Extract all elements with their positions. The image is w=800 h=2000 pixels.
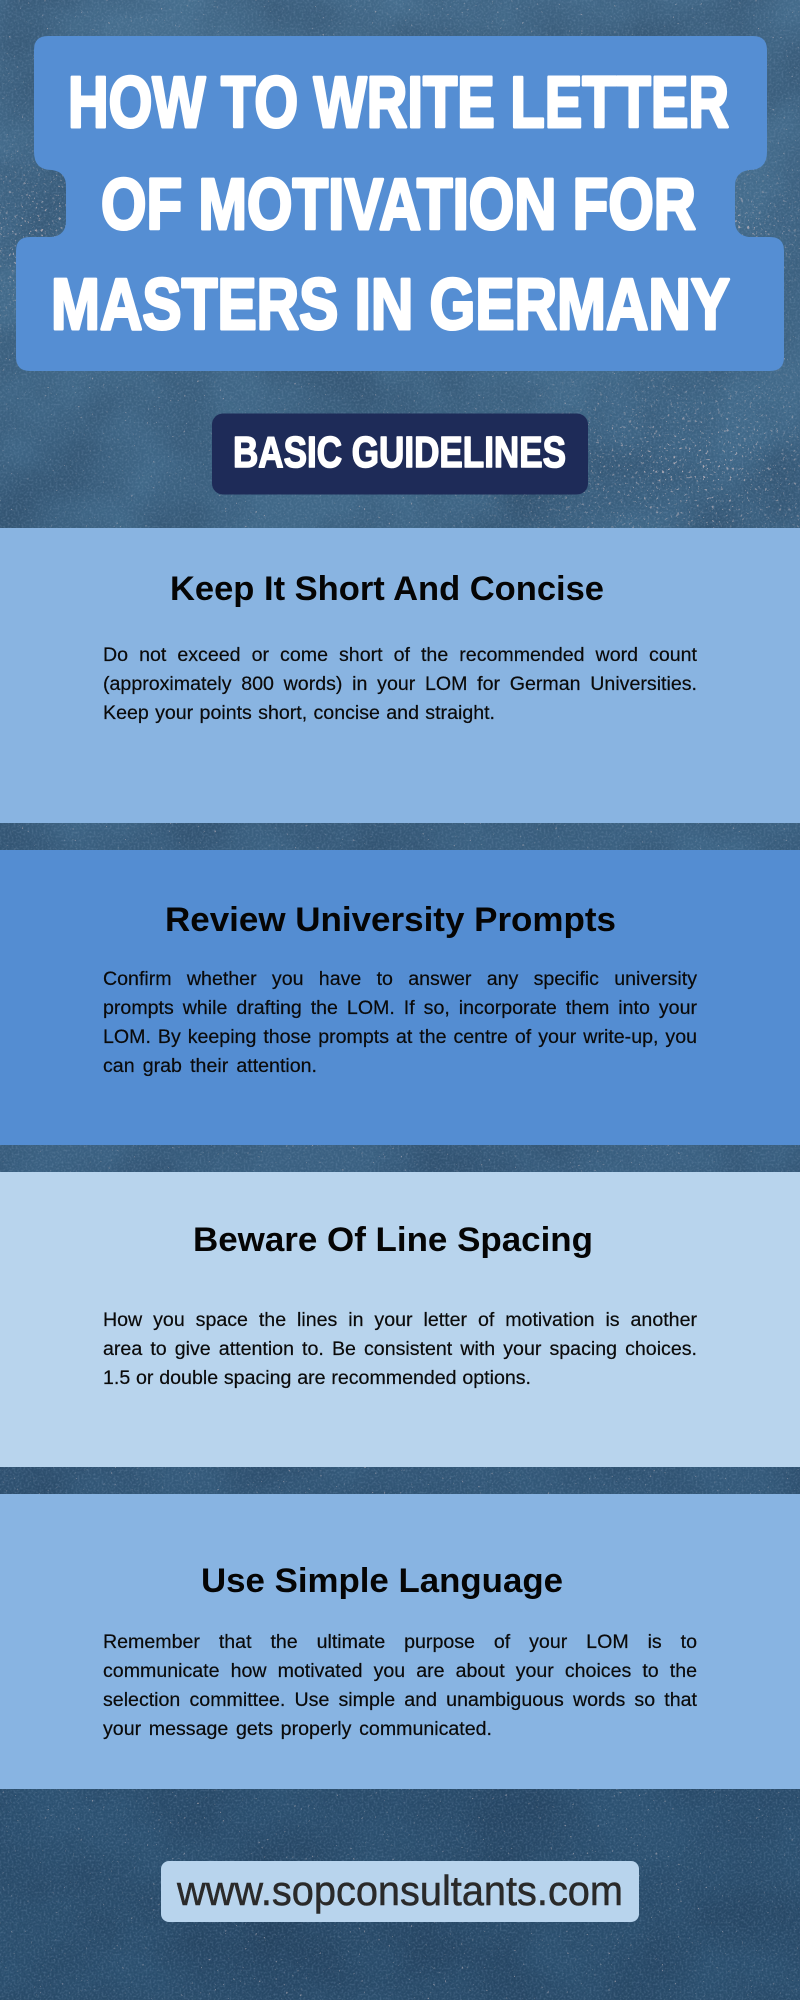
- body text: language: [103, 1631, 697, 1740]
- body text: language: Remember that the ultimate purpose of your LOM is to: [103, 1631, 697, 1653]
- body text: prompts: prompts while drafting the LOM. If so, incorporate them into your: [103, 997, 697, 1019]
- heading: line spacing: Beware Of Line Spacing: [193, 1221, 593, 1259]
- title banner shape: [16, 36, 784, 371]
- panel: use simple language: [0, 1494, 800, 1789]
- body text: spacing: [103, 1309, 697, 1389]
- subtitle badge: [212, 414, 588, 494]
- body text: language: your message gets properly communicated.: [103, 1718, 492, 1740]
- body text: prompts: Confirm whether you have to answer any specific university: [103, 968, 697, 990]
- body text: spacing: 1.5 or double spacing are recommended options.: [103, 1367, 531, 1389]
- body text: spacing: area to give attention to. Be consistent with your spacing choices.: [103, 1338, 697, 1360]
- heading: simple language: Use Simple Language: [201, 1562, 563, 1600]
- body text: word count: [103, 644, 697, 724]
- title text: [51, 63, 730, 345]
- body text: language: communicate how motivated you are about your choices to the: [103, 1660, 697, 1682]
- body text: language: selection committee. Use simple and unambiguous words so that: [103, 1689, 697, 1711]
- heading: keep it short: Keep It Short And Concise: [170, 570, 604, 608]
- heading: review prompts: Review University Prompts: [165, 901, 616, 939]
- body text: prompts: can grab their attention.: [103, 1055, 317, 1077]
- body text: word count: (approximately 800 words) in your LOM for German Universities.: [103, 673, 697, 695]
- website badge: www.sopconsultants.com: [176, 1867, 623, 1914]
- body text: word count: Do not exceed or come short of the recommended word count: [103, 644, 697, 666]
- title banner: [16, 36, 784, 494]
- panel: review university prompts: [0, 850, 800, 1145]
- body text: word count: Keep your points short, concise and straight.: [103, 702, 495, 724]
- body text: prompts: [103, 968, 698, 1077]
- subtitle badge: BASIC GUIDELINES: [233, 428, 566, 477]
- body text: prompts: LOM. By keeping those prompts at the centre of your write-up, you: [103, 1026, 697, 1048]
- panel: beware of line spacing: [0, 1172, 800, 1467]
- body text: spacing: How you space the lines in your letter of motivation is another: [103, 1309, 697, 1331]
- panel: keep it short and concise: [0, 528, 800, 823]
